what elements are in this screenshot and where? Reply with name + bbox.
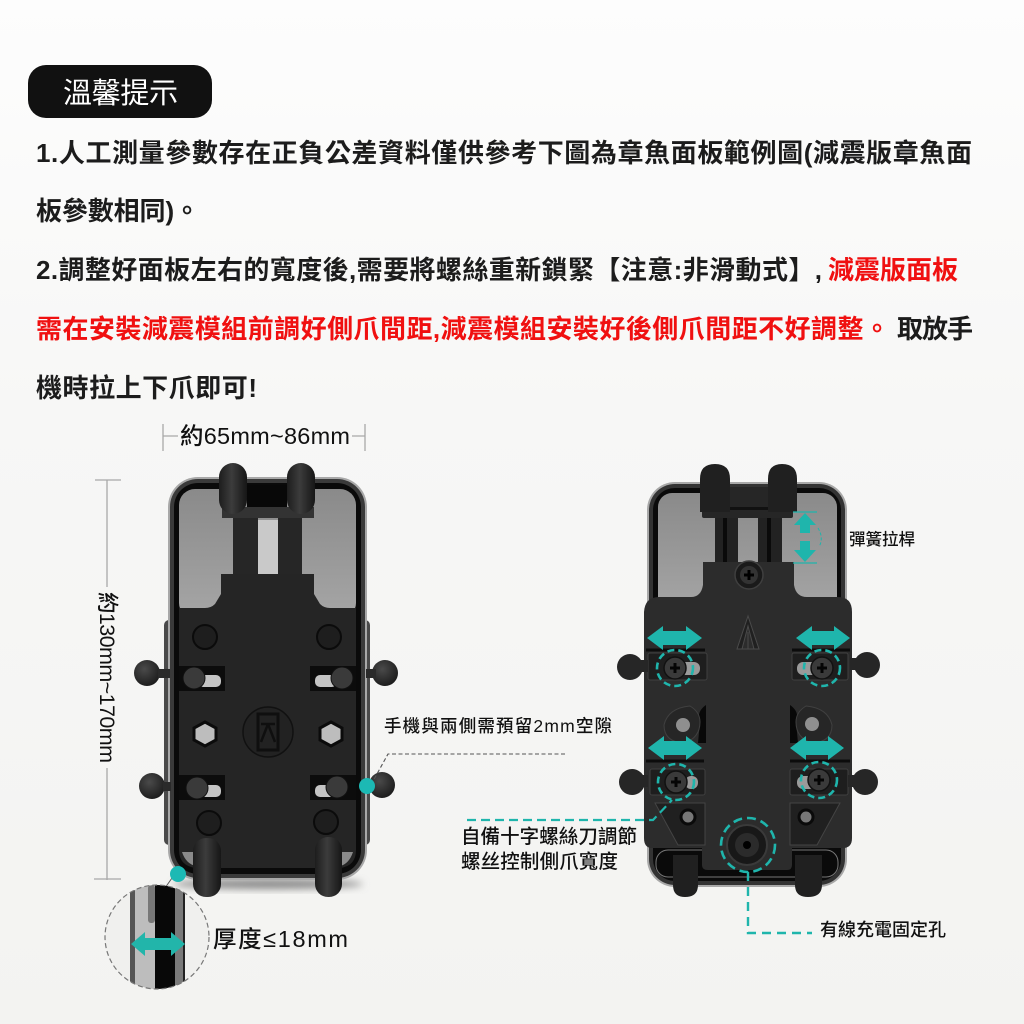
- lower slots: [179, 775, 356, 800]
- plate logo: [737, 616, 759, 649]
- thickness magnifier: [105, 866, 209, 989]
- notice text block: 1.人工測量參數存在正負公差資料僅供參考下圖為章魚面板範例圖(減震版章魚面: [36, 138, 972, 168]
- screw adjustment callout: 螺丝控制側爪寬度: [461, 851, 618, 873]
- phone body: [168, 477, 367, 880]
- notice text block: 2.調整好面板左右的寬度後,需要將螺絲重新鎖緊【注意:非滑動式】,: [36, 255, 822, 285]
- bottom clamp caps: [193, 837, 342, 897]
- teal adjustment arrows: [647, 626, 850, 760]
- slot boxes: [648, 653, 848, 795]
- top clamp: [700, 464, 797, 518]
- bottom recesses: [655, 803, 840, 845]
- adjustment screws: [664, 657, 833, 793]
- hex holes: [194, 722, 342, 746]
- spring travel arrows: [793, 512, 821, 563]
- notice text block: 減震版面板: [828, 255, 958, 285]
- height dimension: 約130mm~170mm: [95, 592, 119, 763]
- upper slots: [179, 666, 356, 691]
- slot shelves: [646, 650, 850, 761]
- notice text block: 取放手: [897, 314, 973, 344]
- bottom clamp caps: [673, 855, 822, 897]
- charging port callout: [721, 818, 946, 940]
- back plate: [644, 562, 852, 870]
- clearance callout: [359, 716, 612, 794]
- side plate: [164, 620, 370, 845]
- slot highlights: [680, 662, 819, 789]
- title pill: 溫馨提示: [63, 77, 178, 110]
- notice text block: 板參數相同)。: [36, 196, 200, 226]
- logo badge: [243, 707, 293, 757]
- teal dashed screw circles: [657, 650, 840, 800]
- top screw: [735, 561, 763, 589]
- thickness label: 厚度≤18mm: [213, 926, 348, 952]
- height dimension: [94, 480, 121, 880]
- notice text block: 機時拉上下爪即可!: [36, 373, 257, 403]
- top clamp: [219, 463, 315, 518]
- phone body: [647, 482, 847, 887]
- title pill: [28, 65, 212, 118]
- clearance callout: 手機與兩側需預留2mm空隙: [384, 716, 612, 736]
- screw adjustment callout: [461, 800, 672, 873]
- bottom corners: [182, 852, 353, 866]
- upper buttons: [193, 625, 341, 649]
- width dimension: 約65mm~86mm: [180, 423, 350, 449]
- notice text block: [36, 138, 973, 403]
- side ball knobs: [617, 652, 880, 795]
- upper arms: [233, 516, 302, 574]
- spring rods: [715, 516, 782, 564]
- screw crosses: [670, 663, 827, 787]
- spring rod label: 彈簧拉桿: [849, 529, 915, 549]
- charging port callout: 有線充電固定孔: [820, 920, 946, 940]
- notice text block: 需在安裝減震模組前調好側爪間距,減震模組安裝好後側爪間距不好調整。: [36, 314, 890, 344]
- side ball knobs: [134, 660, 398, 799]
- charging port: [727, 825, 767, 865]
- shadow: [173, 879, 363, 889]
- back view phone with mount: [617, 464, 880, 897]
- back plate: [179, 574, 356, 868]
- cam plates: [664, 705, 832, 743]
- front view phone with mount: [134, 463, 398, 897]
- screw adjustment callout: 自備十字螺絲刀調節: [461, 826, 637, 848]
- lower buttons: [197, 810, 338, 835]
